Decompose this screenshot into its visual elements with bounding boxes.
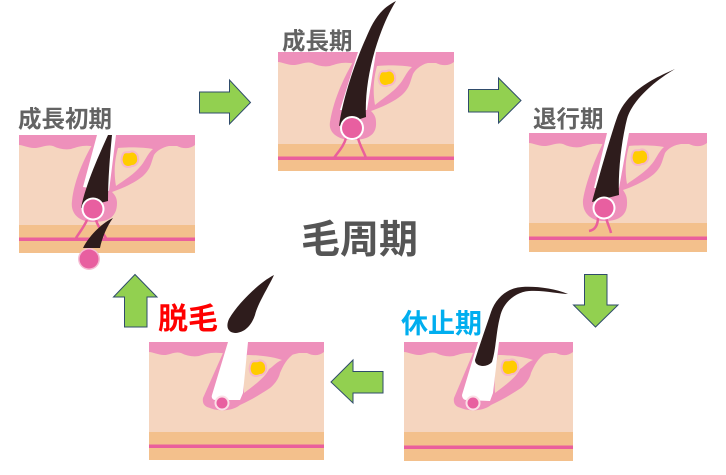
arrow: telogen to shedding	[331, 360, 383, 403]
label: early anagen: 成長初期	[18, 106, 112, 132]
arrow: early anagen to anagen	[200, 80, 250, 124]
panel: telogen skin section	[404, 287, 573, 461]
panel: anagen skin section	[278, 1, 454, 171]
arrow: catagen to telogen	[574, 274, 618, 327]
panel: shedding skin section	[149, 342, 324, 460]
panel: early anagen skin section	[19, 135, 195, 253]
icon: detached old hair and papilla	[78, 218, 113, 270]
panel: catagen skin section	[529, 69, 707, 252]
label: shedding: 脱毛	[158, 303, 218, 336]
title: 毛周期	[301, 219, 418, 262]
label: telogen: 休止期	[401, 309, 482, 339]
arrow: shedding to early anagen	[114, 274, 157, 327]
icon: shed hair	[227, 275, 274, 333]
label: anagen: 成長期	[282, 28, 352, 54]
label: catagen: 退行期	[533, 106, 604, 132]
arrow: anagen to catagen	[468, 78, 521, 123]
